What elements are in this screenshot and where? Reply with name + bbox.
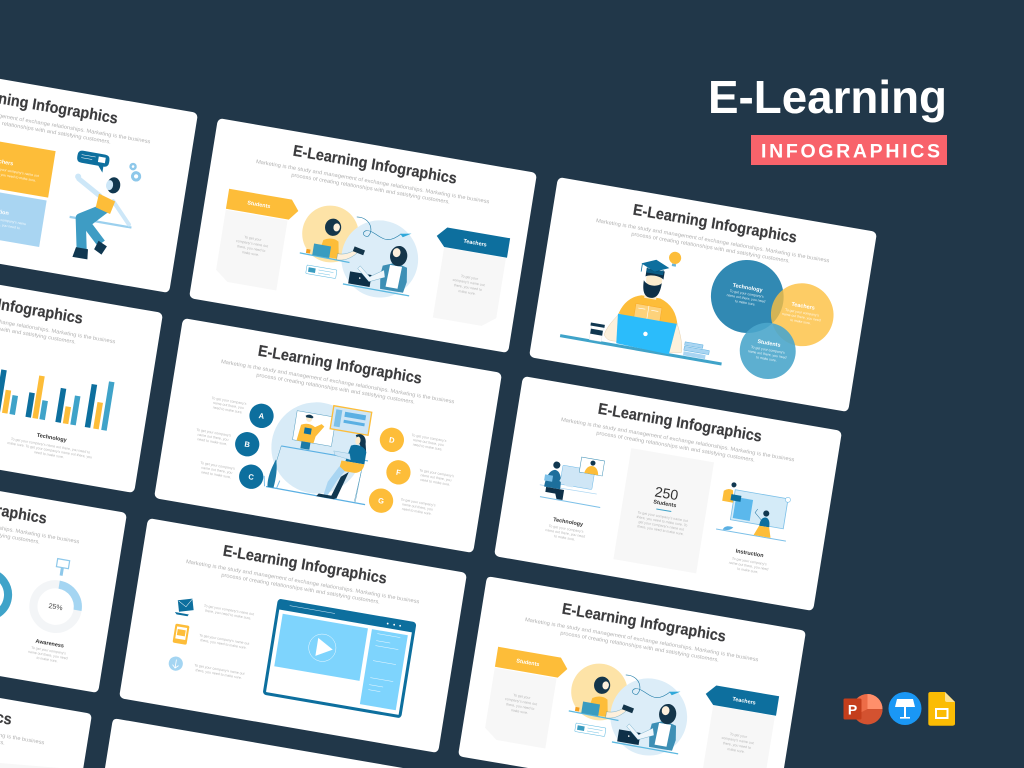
slide subtitle: Marketing is the study and management of exchange relationships. Marketing is the business: [525, 617, 759, 663]
slide content: [483, 591, 788, 768]
slide subtitle: process of creating relationships with and satisfying customers.: [596, 430, 755, 464]
panel: students: [214, 189, 300, 292]
panel: teachers: Teachers: [732, 697, 756, 707]
panel: 250 students stat: get your company's name out: [638, 520, 684, 532]
icon: envelope: [175, 596, 195, 617]
slide subtitle: [0, 499, 80, 552]
panel: teachers: [424, 226, 510, 328]
technology text: to make sure.: [554, 534, 575, 542]
panel: 250 students stat: there, you need to make sure. To: [636, 515, 688, 528]
circle: students: [736, 318, 800, 383]
panel: students: make sure.: [242, 250, 259, 257]
option B: need to make sure.: [197, 437, 227, 446]
illustration: online class at desk: [262, 395, 380, 505]
caption: awareness: Awareness: [35, 639, 64, 649]
illustration: two people with laptops: [294, 201, 425, 303]
slide title and subtitle: [0, 678, 49, 753]
bar chart: [0, 363, 114, 431]
slide subtitle: process of creating relationships with and satisfying customers.: [256, 372, 415, 406]
main heading: E-Learning: E-Learning: [708, 71, 947, 123]
donut chart: 25 percent: 25%: [48, 602, 64, 612]
panel: teachers: make sure.: [458, 289, 476, 296]
icon: download: [168, 655, 184, 672]
circle: students: to make sure.: [756, 355, 777, 363]
option G: need to make sure.: [402, 507, 432, 516]
icon: tablet mail: [173, 623, 190, 645]
option A: name out there, you: [213, 401, 244, 410]
panel: teachers: To get your: [730, 732, 748, 739]
badge: INFOGRAPHICS: [751, 135, 947, 165]
option D: need to make sure.: [412, 443, 443, 452]
panel: teachers: [694, 684, 779, 768]
circle: technology: name out there, you need: [726, 293, 766, 304]
icon: stacked books: [683, 342, 710, 360]
circle: teachers: [766, 278, 838, 351]
caption text: To get your company's: [31, 646, 66, 656]
circle: teachers: to make sure.: [790, 318, 811, 325]
slide subtitle: process of creating relationships with and satisfying customers.: [560, 630, 719, 664]
panel: students: there, you need to: [237, 244, 266, 253]
panel: students: [483, 647, 569, 750]
video area: [274, 614, 368, 681]
circle: teachers: To get your company's: [785, 308, 820, 318]
chart caption: Technology: [36, 433, 67, 444]
slide: graduate with three circles: [529, 177, 877, 412]
panel: teachers: [0, 129, 56, 198]
option D: name out there, you: [413, 438, 444, 447]
option C: C: [248, 472, 255, 482]
option A: To get your company's: [211, 396, 247, 406]
browser window with video: [264, 600, 415, 717]
slide title: E-Learning Infographics: [257, 343, 423, 388]
panel: students: To get your: [244, 235, 263, 242]
option B: To get your company's: [196, 428, 232, 438]
icon: Google Slides: [928, 692, 955, 726]
option B: B: [244, 440, 251, 449]
badge: INFOGRAPHICS: INFOGRAPHICS: [761, 140, 940, 162]
panel: 250 students stat: Students: [653, 499, 677, 509]
text: item 2: To get your company's name out: [199, 633, 250, 646]
panel: 250 students stat: [613, 448, 714, 573]
caption text: [27, 645, 69, 665]
option F: [385, 458, 455, 494]
technology text: To get your company's: [548, 524, 584, 534]
instruction text: To get your company's: [732, 557, 767, 567]
instruction text: name out there, you need: [728, 561, 769, 571]
panel: teachers: there, you need to: [723, 741, 751, 750]
option A: need to make sure.: [212, 405, 243, 415]
option D: D: [388, 435, 396, 445]
slide: students and teachers bottom: [459, 577, 805, 768]
instruction text: [728, 556, 769, 576]
panel: students: make sure.: [511, 708, 528, 715]
text: item 2: there, you need to make sure.: [200, 638, 247, 650]
panel: teachers: Teachers: [463, 239, 487, 249]
option C: To get your company's: [200, 461, 236, 471]
slide subtitle: Marketing is the study and management of exchange relationships. Marketing is the business: [186, 559, 420, 605]
circle: students: Students: [757, 339, 781, 349]
circle: technology: To get your company's: [729, 289, 764, 299]
slide title: E-Learning Infographics: [222, 543, 388, 588]
illustration: student at laptop: [560, 235, 738, 364]
option F: F: [395, 468, 402, 477]
panel: teachers: To get your: [461, 274, 479, 281]
slide: 250 students: [494, 376, 842, 611]
panel: students: company's name out: [236, 239, 268, 248]
illustration: person sitting with speech bubble: [61, 150, 142, 266]
option C: need to make sure.: [201, 470, 231, 479]
caption: technology: Technology: [553, 517, 583, 528]
chart description: make sure. To get your company's name out there, you: [7, 441, 92, 460]
panel: students: Students: [247, 200, 271, 210]
slide title: E-Learning Infographics: [632, 202, 798, 247]
text: item 1: there, you need to make sure.: [205, 609, 252, 621]
donut chart: 25 percent: [30, 556, 85, 632]
panel: students: Students: [516, 658, 540, 668]
slide subtitle: Marketing is the study and management of exchange relationships. Marketing is the business: [596, 218, 830, 264]
donut chart: teal: [0, 547, 15, 620]
panel: students: company's name out: [505, 697, 537, 706]
slide title: E-Learning Infographics: [597, 401, 763, 446]
option G: [367, 487, 437, 522]
circle: technology: to make sure.: [735, 299, 756, 307]
icon: gears: [129, 164, 142, 181]
slide: blank bottom slide: [105, 719, 403, 768]
chart description: To get your company's name out there, you need to: [11, 437, 90, 455]
panel: students: there, you need to: [506, 702, 535, 711]
slide subtitle: Marketing is the study and management of exchange relationships. Marketing is the business: [256, 159, 490, 205]
slide: left column row 1, person on bench: [0, 58, 198, 293]
gray panel: [0, 763, 60, 768]
slide subtitle: process of creating relationships with and satisfying customers.: [631, 231, 790, 265]
icon: PowerPoint: P: [848, 702, 857, 718]
option B: [194, 423, 261, 458]
slide: left column row 2, bar chart: [0, 258, 163, 493]
circle: students: name out there, you need: [748, 349, 787, 360]
panel: teachers: company's name out: [452, 278, 485, 287]
chart description: need to make sure.: [34, 450, 64, 459]
slide title: E-Learning Infographics: [561, 601, 727, 646]
caption text: name out there, you need: [28, 650, 68, 660]
illustration: instruction: [716, 481, 794, 541]
slide: left column row 4: [0, 678, 91, 768]
option G: G: [377, 496, 385, 506]
icon: Keynote: [888, 692, 922, 725]
option F: need to make sure.: [420, 478, 450, 487]
caption: instruction: Instruction: [735, 548, 764, 559]
option F: To get your company's: [419, 468, 455, 478]
circle: students: To get your company's: [751, 345, 785, 355]
sidebar: [360, 629, 408, 710]
slide: students and teachers top: [189, 118, 537, 353]
option D: To get your company's: [411, 433, 447, 443]
panel: teachers: make sure.: [727, 747, 745, 754]
option C: name out there, you: [201, 466, 233, 475]
illustration: student at monitor: [538, 451, 608, 508]
panel: education: [0, 179, 47, 247]
slide subtitle: process of creating relationships with and satisfying customers.: [291, 172, 450, 206]
option C: [198, 456, 265, 491]
chart description: [6, 436, 93, 464]
slide subtitle: process of creating relationships with and satisfying customers.: [221, 572, 380, 606]
circle: technology: [706, 254, 789, 339]
text: item 3: To get your company's name out: [194, 663, 245, 676]
option B: name out there, you: [197, 433, 229, 442]
text: item 1: To get your company's name out: [204, 604, 254, 616]
icon: speech bubble: [75, 150, 110, 173]
technology text: [544, 523, 586, 543]
slide: video player: [119, 518, 467, 753]
technology text: name out there, you need: [545, 528, 585, 539]
option G: To get your company's: [401, 498, 436, 507]
panel: 250 students stat: there, you need to make sure.: [637, 524, 684, 536]
icon: PowerPoint: [844, 694, 883, 724]
panel: 250 students stat: To get your company's name out: [637, 510, 688, 523]
panel: students: To get your: [513, 693, 532, 700]
text: item 3: there, you need to make sure.: [195, 668, 242, 680]
circle: teachers: Teachers: [791, 302, 815, 312]
option G: name out there, you: [402, 502, 433, 512]
panel: teachers: there, you need to: [454, 283, 482, 292]
slide title: E-Learning Infographics: [292, 143, 458, 188]
icon: light bulb: [668, 251, 682, 267]
slide: A to G options: [154, 318, 502, 553]
slide subtitle: Marketing is the study and management of exchange relationships. Marketing is the business: [221, 359, 455, 405]
panel: teachers: company's name out: [721, 736, 754, 745]
option D: [378, 426, 447, 461]
option A: [208, 395, 275, 430]
slide subtitle: Marketing is the study and management of exchange relationships. Marketing is the business: [561, 417, 795, 463]
option F: name out there, you: [420, 473, 452, 482]
caption text: to make sure.: [36, 656, 58, 663]
instruction text: to make sure.: [737, 567, 759, 574]
slide: left column row 3, donut charts: [0, 458, 127, 693]
circle: technology: Technology: [732, 283, 763, 294]
panel: 250 students stat: 250: [653, 484, 679, 504]
icon: coffee cup: [588, 322, 605, 342]
illustration: two people with laptops: [563, 659, 694, 761]
circle: teachers: name out there, you need: [782, 312, 821, 322]
option A: A: [258, 411, 265, 421]
